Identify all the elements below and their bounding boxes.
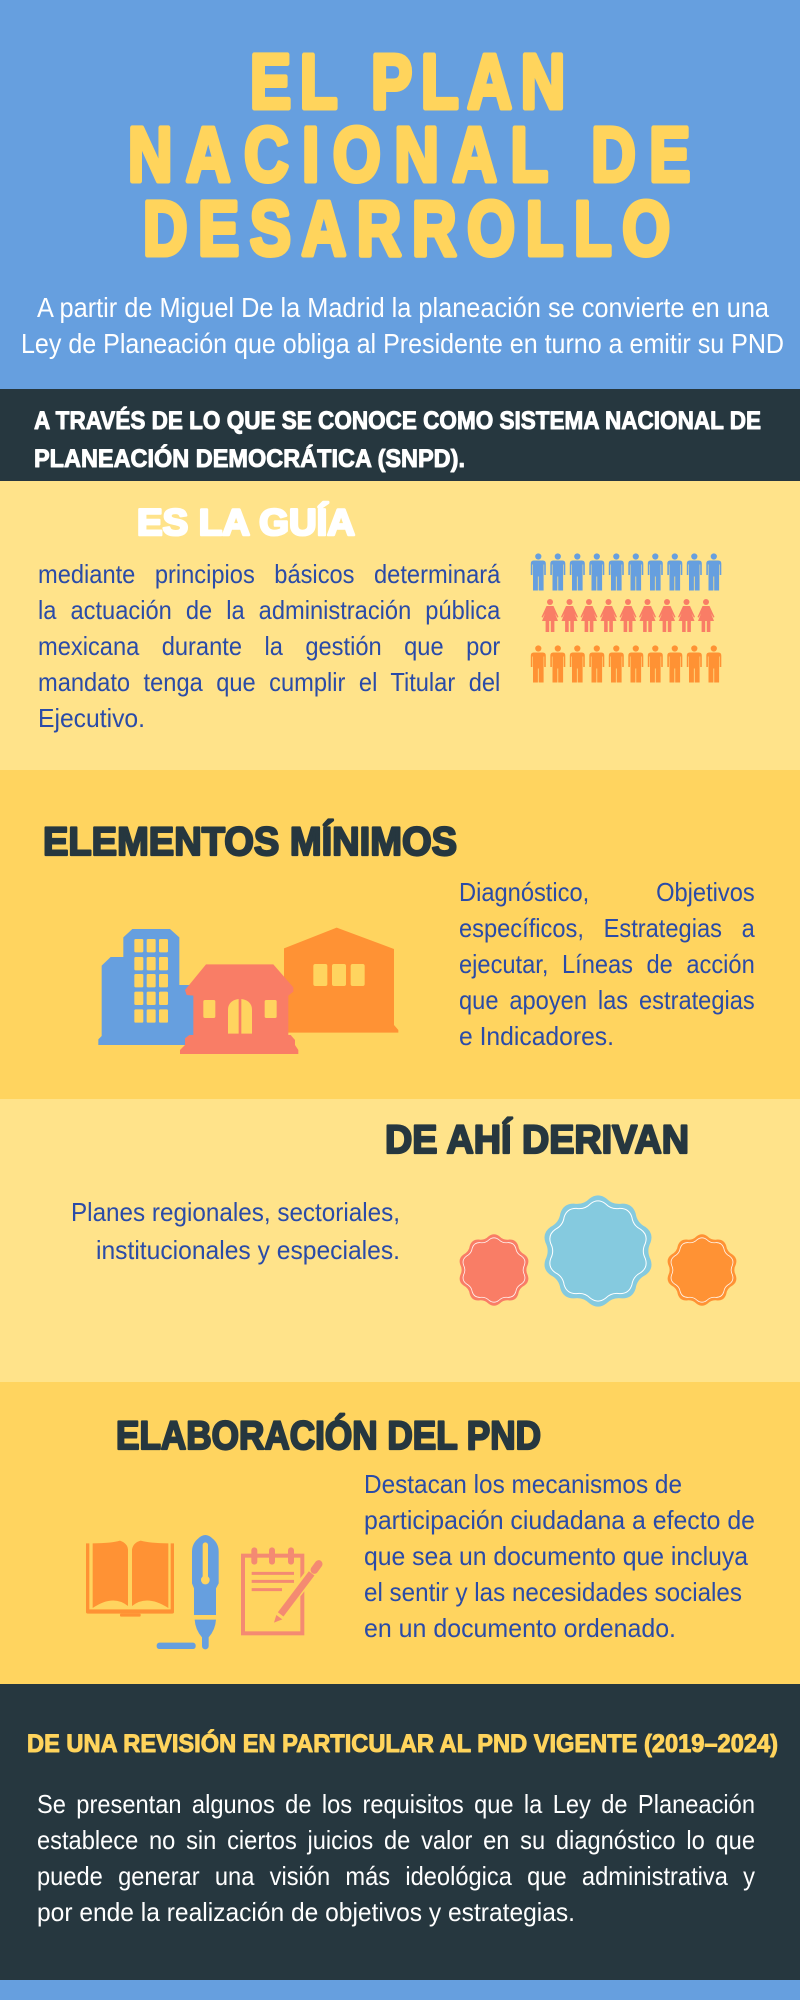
icon: buildings <box>98 928 398 1054</box>
icon: notepad and pencil <box>243 1547 319 1633</box>
icon: orange badge <box>668 1234 736 1306</box>
text: revisión body: puede generar una visión más ideológica que administrativa y <box>37 1861 755 1891</box>
text: guía body: mandato tenga que cumplir el Titular del <box>38 667 500 697</box>
icon: blue badge <box>544 1195 652 1307</box>
text: elementos body: Diagnóstico, Objetivos <box>459 877 755 907</box>
intro text <box>21 292 784 359</box>
icon: people rows <box>531 553 721 682</box>
text: guía body: la actuación de la administración pública <box>38 595 500 625</box>
text: derivan body: institucionales y especiales. <box>96 1235 400 1265</box>
title: EL PLAN <box>250 38 565 125</box>
text: elaboración body: Destacan los mecanismos de <box>364 1469 682 1499</box>
text: derivan body: Planes regionales, sectoriales, <box>71 1197 400 1227</box>
heading: elementos mínimos: ELEMENTOS MÍNIMOS <box>43 819 457 864</box>
text: last guía line: Ejecutivo. <box>38 703 145 733</box>
text: guía body <box>38 559 500 697</box>
text: elementos body <box>459 877 755 1015</box>
text: revisión body: Se presentan algunos de los requisitos que la Ley de Planeación <box>37 1789 755 1819</box>
text: revisión body <box>37 1789 755 1891</box>
text: guía body: mexicana durante la gestión que por <box>38 631 500 661</box>
text: guía body: mediante principios básicos determinará <box>38 559 500 589</box>
banner text <box>34 406 761 473</box>
panel: elaboración del PND <box>0 1382 800 1684</box>
panel: es la guía <box>0 481 800 770</box>
title <box>128 38 690 272</box>
heading: es la guía: ES LA GUÍA <box>137 502 355 543</box>
text: elaboración body <box>364 1469 755 1643</box>
heading: de ahí derivan: DE AHÍ DERIVAN <box>385 1117 689 1162</box>
text: elaboración body: el sentir y las necesidades sociales <box>364 1577 742 1607</box>
panel: header <box>0 0 800 389</box>
heading: elaboración del PND: ELABORACIÓN DEL PND <box>116 1412 541 1458</box>
panel: de ahí derivan <box>0 1099 800 1382</box>
icon: salmon badge <box>460 1234 528 1306</box>
icon: fountain pen <box>157 1535 219 1649</box>
text: last revisión line: por ende la realización de objetivos y estrategias. <box>37 1897 575 1927</box>
icon: open book <box>86 1541 174 1617</box>
text: elementos body: que apoyen las estrategias <box>459 985 755 1015</box>
text: elaboración body: en un documento ordenado. <box>364 1613 676 1643</box>
banner text: PLANEACIÓN DEMOCRÁTICA (SNPD). <box>34 443 465 473</box>
text: revisión body: establece no sin ciertos juicios de valor en su diagnóstico lo que <box>37 1825 755 1855</box>
title: DESARROLLO <box>143 185 670 272</box>
heading: revisión: DE UNA REVISIÓN EN PARTICULAR AL PND VIGENTE (2019–2024) <box>27 1728 778 1758</box>
text: elaboración body: participación ciudadana a efecto de <box>364 1505 755 1535</box>
panel: revisión PND vigente <box>0 1684 800 1980</box>
title: NACIONAL DE <box>128 111 690 198</box>
text: elementos body: específicos, Estrategias a <box>459 913 755 943</box>
text: elementos body: ejecutar, Líneas de acción <box>459 949 755 979</box>
text: derivan body <box>71 1197 400 1265</box>
panel: elementos mínimos <box>0 770 800 1099</box>
text: last elementos line: e Indicadores. <box>459 1021 614 1051</box>
text: elaboración body: que sea un documento que incluya <box>364 1541 749 1571</box>
panel: SNPD banner <box>0 389 800 481</box>
panel: footer band <box>0 1980 800 2000</box>
